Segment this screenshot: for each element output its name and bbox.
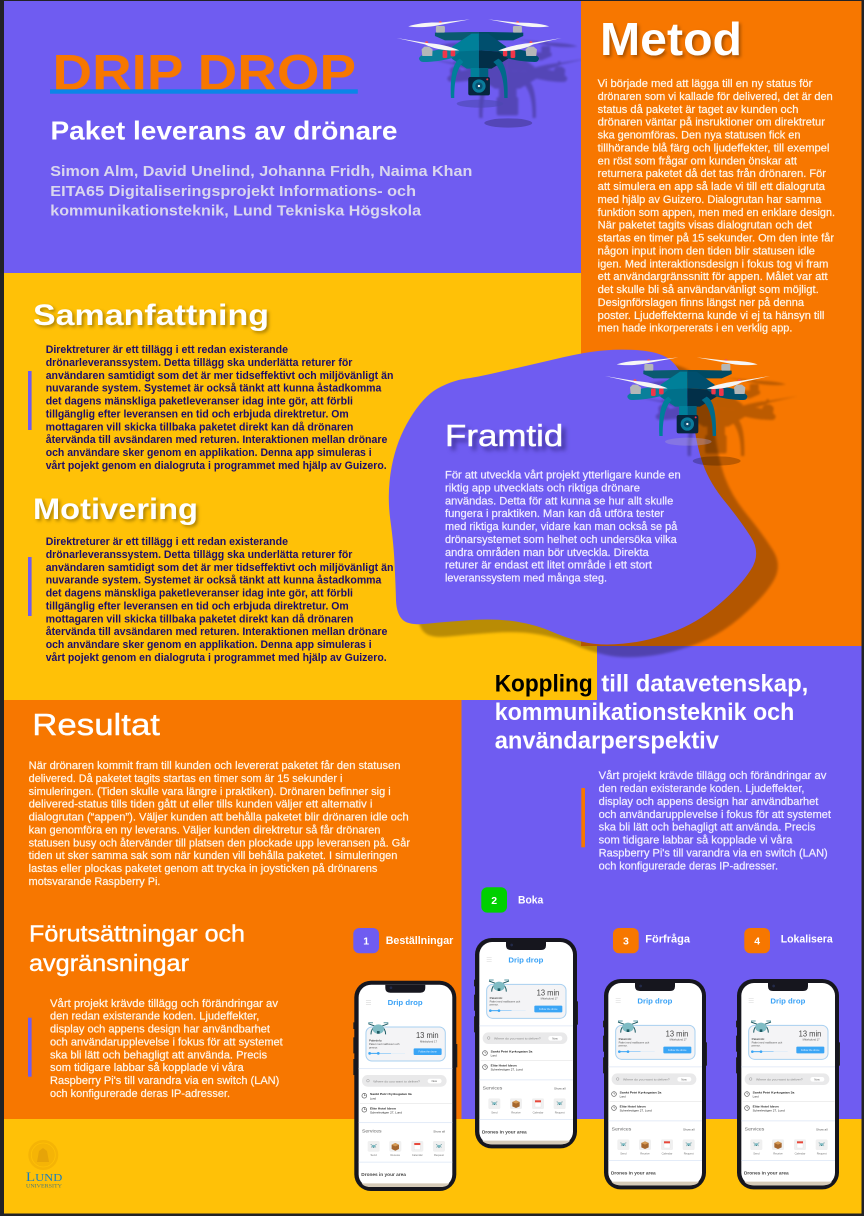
phone 4: Now (814, 1077, 820, 1081)
phone 2: Sankt Petri Kyrkogatan 3a (491, 1049, 533, 1053)
phone 4: Drip drop (770, 996, 806, 1005)
heading: koppling (495, 671, 808, 754)
heading: koppling: kommunikationsteknik och (495, 699, 794, 726)
step 2: boka: Boka (518, 894, 544, 906)
phone 4: Scheelevägen 27, Lund (753, 1109, 785, 1113)
text: metod body: en röst som frågar om kunden önskar att (598, 155, 797, 167)
text: motivering body: nuvarande system. Systemet är också tänkt att kunna åstadkomma (46, 575, 381, 587)
text: motivering body: och användare sker genom en applikation. Denna app simuleras i (46, 639, 372, 651)
phone 1: Request (434, 1153, 444, 1157)
heading: koppling: användarperspektiv (495, 727, 720, 754)
accent bar (581, 788, 585, 847)
text: resultat body: statusen busy och återvänder till platsen den plockade upp leveransen på. Går (29, 837, 410, 849)
step 3: förfråga: 3 (623, 936, 629, 948)
text: resultat body: simuleringen. (Tiden skulle vara längre i praktiken). Drönaren befinner sig i (29, 786, 391, 798)
text: framtid body: returer är endast ett litet område i ett stort (445, 560, 652, 572)
text: resultat body: När drönaren kommit fram till kunden och levererat paketet får den statusen (29, 760, 401, 772)
phone 3: pennor. (619, 1044, 628, 1048)
phone 2: Receive (511, 1110, 521, 1114)
text: resultat body: kan genomföra en ny leverans. Väljer kunden direktretur så får drönaren (29, 824, 381, 836)
text: samanfattning body: drönarleveranssystem. Detta tillägg ska underlätta returer för (46, 357, 352, 369)
phone 2: Calendar (533, 1110, 544, 1114)
text: koppling body: display och appens design har användbarhet (599, 796, 818, 808)
phone 2: Mittskylund 17 (541, 997, 558, 1001)
text: framtid body: drönarsystemet som helhet och undersöka vilka (445, 534, 677, 546)
text: samanfattning body: det dagens mänskliga paketleveranser idag inte gör, att förbli (46, 396, 353, 408)
phone 1: Drip drop (388, 998, 423, 1007)
phone 1: Elite Hotel Ideon (370, 1106, 396, 1110)
text: motivering body: återvända till avsändaren med returen. Interaktionen mellan drönare (46, 626, 387, 638)
text: motivering body: tillgänglig efter leveransen en tid och erbjuda direktretur. Om (46, 600, 349, 612)
authors: EITA65 Digitaliseringsprojekt Informations- och (50, 183, 416, 200)
icon: drone framtid (605, 357, 798, 466)
phone 1: pennor. (369, 1045, 378, 1049)
text: metod body: drönaren väntar på insruktioner om direktretur (598, 117, 825, 129)
text: koppling body: ska bli lätt och behagligt att använda. Precis (599, 822, 815, 834)
text: koppling body: som tidigare labbar så kopplade vi våra (599, 835, 792, 847)
phone 1: Show all (433, 1129, 445, 1133)
phone 2: Elite Hotel Ideon (491, 1064, 517, 1068)
text: koppling body: och användarupplevelse i fokus för att systemet (599, 809, 831, 821)
phone 4: Where do you want to deliver? (756, 1078, 803, 1082)
text: förutsättningar body: som tidigare labbar så kopplade vi våra (50, 1062, 244, 1074)
phone 4: Services (745, 1127, 764, 1132)
phone 4: Drones in your area (744, 1170, 789, 1175)
text: metod body: returnera paketet då det tas från drönaren. För (598, 168, 826, 180)
text: samanfattning body: tillgänglig efter leveransen en tid och erbjuda direktretur. Om (46, 408, 349, 420)
text: motivering body: användaren samtidigt som det är mer tidseffektivt och miljövänligt än (46, 562, 393, 574)
phone 4: Elite Hotel Ideon (753, 1105, 779, 1109)
subtitle: Paket leverans av drönare (50, 115, 398, 145)
text: metod body: igen. Med interaktionsdesign i fokus tog vi fram (598, 258, 829, 270)
panel: koppling background (462, 646, 862, 1119)
text: förutsättningar body: och konfigurerade deras IP-adresser. (50, 1088, 230, 1100)
heading: förutsättningar: Förutsättningar och (29, 921, 245, 947)
phone 1: Scheelevägen 27, Lund (370, 1110, 403, 1114)
step 2: boka: 2 (491, 895, 497, 907)
text: motivering body: Direktreturer är ett tillägg i ett redan existerande (46, 536, 288, 548)
phone 4: Paketinfo: (752, 1037, 765, 1041)
phone 3: Request (684, 1151, 694, 1155)
phone 4: Calendar (795, 1151, 806, 1155)
text: förutsättningar body: den redan existerande koden. Ljudeffekter, (50, 1011, 259, 1023)
heading: samanfattning: Samanfattning (33, 299, 269, 332)
panel: koppling (495, 671, 831, 872)
phone 2: 13 min (537, 988, 559, 997)
panel: header (4, 1, 590, 273)
text: motivering body: vårt pojekt genom en dialogruta i programmet med hjälp av Guizero. (46, 652, 387, 664)
phone 3: Sankt Petri Kyrkogatan 3a (620, 1090, 662, 1094)
phone 2: Now (552, 1036, 558, 1040)
phone 2: Where do you want to deliver? (494, 1037, 541, 1041)
accent bar (28, 557, 32, 616)
text: förutsättningar body (50, 998, 283, 1100)
text: metod body: någon input inom den tiden blir statusen idle (598, 245, 815, 257)
text: metod body: När paketet tagits visas dialogrutan och det (598, 220, 812, 232)
text: förutsättningar body: och användarupplevelse i fokus för att systemet (50, 1036, 283, 1048)
step 4: lokalisera: Lokalisera (781, 934, 834, 946)
text: framtid body: med riktiga kunder, vidare kan man också se på (445, 521, 677, 533)
text: förutsättningar body: ska bli lätt och behagligt att använda. Precis (50, 1049, 267, 1061)
step 1: beställningar: Beställningar (386, 935, 454, 947)
text: framtid body: riktig app utvecklats och riktiga drönare (445, 482, 640, 494)
text: metod body: status då paketet är taget av kunden och (598, 104, 798, 116)
text: samanfattning body: nuvarande system. Systemet är också tänkt att kunna åstadkomma (46, 383, 381, 395)
phone 2: Drones in your area (482, 1129, 527, 1134)
text: resultat body: lastas eller plockas paketet genom att trycka in joysticken på drönarens (29, 863, 377, 875)
phone 2: Send (491, 1110, 498, 1114)
step 4: lokalisera: 4 (754, 936, 760, 948)
text: metod body: startas en timer på 15 sekunder. Om den inte får (598, 233, 834, 245)
text: motivering body: drönarleveranssystem. Detta tillägg ska underlätta returer för (46, 549, 352, 561)
phone 1: Where do you want to deliver? (373, 1079, 420, 1083)
panel: samanfattning and motivering (4, 273, 597, 700)
text: samanfattning body: mottagaren vill skicka tillbaka paketet direkt kan då drönaren (46, 421, 353, 433)
text: metod body: poster. Ljudeffekterna kunde vi ej ta hänsyn till (598, 310, 824, 322)
text: framtid body: användas. Detta för att kunna se hur allt skulle (445, 495, 673, 507)
text: förutsättningar body: Raspberry Pi's till varandra via en switch (LAN) (50, 1075, 279, 1087)
panel: framtid (389, 350, 798, 657)
text: metod body: att simulera en app så lade vi till ett dialogruta (598, 181, 825, 193)
logo: Lund University (26, 1140, 62, 1190)
phone 1: Receive (390, 1153, 401, 1157)
text: motivering body: mottagaren vill skicka tillbaka paketet direkt kan då drönaren (46, 613, 353, 625)
phone 1: 13 min (416, 1031, 439, 1040)
text: metod body: men hade inkorpererats i en verklig app. (598, 323, 792, 335)
phone 3: Services (612, 1127, 631, 1132)
text: koppling body (599, 770, 831, 872)
accent bar (28, 1018, 32, 1077)
phone 4: Request (817, 1151, 827, 1155)
phone 1: Mittskylund 17 (420, 1039, 437, 1043)
phone 4: pennor. (752, 1044, 761, 1048)
phone 1: Paketinfo: (369, 1039, 382, 1043)
phone 3: Paketinfo: (619, 1037, 632, 1041)
phone 3: Send (620, 1151, 627, 1155)
text: metod body: drönaren som vi kallade för delivered, det är den (598, 91, 833, 103)
text: samanfattning body: vårt pojekt genom en dialogruta i programmet med hjälp av Guizero. (46, 460, 387, 472)
phone 2 (474, 938, 578, 1148)
text: metod body: ska genomföras. Den nya statusen fick en (598, 130, 800, 142)
phone 3: Now (681, 1077, 687, 1081)
step 4: lokalisera (744, 928, 834, 953)
text: koppling body: och konfigurerade deras IP-adresser. (599, 860, 778, 872)
logo: Lund University: UNIVERSITY (26, 1184, 62, 1190)
authors (50, 163, 472, 220)
phone 4 (736, 979, 840, 1189)
text: koppling body: Vårt projekt krävde tillägg och förändringar av (599, 770, 827, 782)
heading: koppling: Koppling (495, 671, 593, 698)
text: förutsättningar body: display och appens design har användbarhet (50, 1024, 270, 1036)
text: motivering body (46, 536, 393, 664)
phone 1: Now (432, 1079, 437, 1083)
text: resultat body: delivered-status tills tiden gått ut eller tills kunden väljer ett alternativ i (29, 799, 372, 811)
phone 2: Lund (491, 1054, 497, 1058)
phone 3: 13 min (666, 1029, 688, 1038)
phone 3: Receive (640, 1151, 650, 1155)
phone 3 (603, 979, 707, 1189)
phone 4: Send (753, 1151, 760, 1155)
text: resultat body: tiden ut sker samma sak som när kunden vill behålla paketet. I simuleringen (29, 850, 398, 862)
heading: förutsättningar (29, 921, 245, 976)
step 1: beställningar: 1 (363, 936, 369, 948)
text: metod body: ett användargränssnitt för appen. Målet var att (598, 271, 828, 283)
phone 1: Paket med mailboxen och (369, 1042, 400, 1046)
panel: footer (4, 1119, 862, 1214)
phone 2: pennor. (490, 1003, 499, 1007)
text: resultat body: delivered. Då paketet tagits startas en timer som är 15 sekunder i (29, 773, 342, 785)
phone 3: Follow the drone (668, 1049, 687, 1052)
phone 1: Sankt Petri Kyrkogatan 3a (370, 1092, 412, 1096)
step 3: förfråga (613, 928, 691, 953)
text: framtid body: leveranssystem med många steg. (445, 572, 607, 584)
text: metod body: Vi började med att lägga till en ny status för (598, 78, 813, 90)
phone 4: Mittskylund 17 (803, 1038, 820, 1042)
phone 3: Drones in your area (611, 1170, 656, 1175)
text: motivering body: det dagens mänskliga paketleveranser idag inte gör, att förbli (46, 588, 353, 600)
phone 4: Sankt Petri Kyrkogatan 3a (753, 1090, 795, 1094)
text: samanfattning body: Direktreturer är ett tillägg i ett redan existerande (46, 344, 288, 356)
panel: resultat (4, 700, 462, 1119)
phone 2: Follow the drone (539, 1008, 558, 1011)
panel: metod (581, 1, 862, 646)
text: samanfattning body: och användare sker genom en applikation. Denna app simuleras i (46, 447, 372, 459)
phone 2: Paket med mailboxen och (490, 999, 521, 1003)
heading: förutsättningar: avgränsningar (29, 950, 189, 976)
heading: motivering: Motivering (33, 493, 198, 526)
phone 4: Lund (753, 1095, 759, 1099)
step 1: beställningar (353, 928, 454, 953)
phone 2: Show all (554, 1087, 566, 1091)
title: DRIP DROP (52, 44, 356, 100)
blob (389, 350, 756, 645)
step 2: boka (481, 887, 544, 913)
text: framtid body: andra områden man bör utveckla. Direkta (445, 547, 649, 559)
authors: kommunikationsteknik, Lund Tekniska Högskola (50, 203, 422, 220)
heading: resultat: Resultat (32, 707, 160, 742)
phone 4: Paket med mailboxen och (752, 1040, 783, 1044)
phone 1 (353, 981, 457, 1191)
text: metod body: tillhörande blå färg och ljudeffekter, till exempel (598, 142, 829, 154)
phone 2: Scheelevägen 27, Lund (491, 1068, 523, 1072)
text: metod body: det skulle bli så användarvänligt som möjligt. (598, 284, 819, 296)
text: metod body: med hjälp av Guizero. Dialogrutan har samma (598, 194, 821, 206)
phone 1: Lund (370, 1096, 376, 1100)
step 3: förfråga: Förfråga (645, 934, 691, 946)
phone 1: Calendar (412, 1153, 423, 1157)
text: samanfattning body: användaren samtidigt som det är mer tidseffektivt och miljövänligt än (46, 370, 393, 382)
text: metod body: Designförslagen finns längst ner på denna (598, 297, 804, 309)
text: framtid body: För att utveckla vårt projekt ytterligare kunde en (445, 470, 681, 482)
heading: koppling: till datavetenskap, (601, 671, 808, 698)
heading: framtid: Framtid (445, 418, 563, 453)
text: koppling body: den redan existerande koden. Ljudeffekter, (599, 783, 804, 795)
phone 2: Drip drop (508, 955, 544, 964)
phone 3: Paket med mailboxen och (619, 1040, 650, 1044)
accent bar (28, 371, 32, 430)
phone 3: Show all (683, 1128, 695, 1132)
phone 4: 13 min (799, 1029, 821, 1038)
text: samanfattning body: återvända till avsändaren med returen. Interaktionen mellan drönare (46, 434, 387, 446)
phone 4: Follow the drone (801, 1049, 820, 1052)
phone 3: Scheelevägen 27, Lund (620, 1109, 652, 1113)
phone 1: Send (371, 1153, 377, 1157)
phone 4: Receive (773, 1151, 783, 1155)
phone 2: Services (483, 1086, 502, 1091)
text: samanfattning body (46, 344, 393, 472)
text: resultat body: dialogrutan (“appen”). Väljer kunden att behålla paketet blir drönaren idle och (29, 812, 409, 824)
authors: Simon Alm, David Unelind, Johanna Fridh, Naima Khan (50, 163, 472, 180)
text: förutsättningar body: Vårt projekt krävde tillägg och förändringar av (50, 998, 279, 1010)
phone 1: Drones in your area (361, 1172, 407, 1177)
phone 2: Request (555, 1110, 565, 1114)
phone 1: Services (362, 1128, 382, 1133)
phone 2: Paketinfo: (490, 996, 503, 1000)
phone 3: Where do you want to deliver? (623, 1078, 670, 1082)
text: framtid body: fungera i praktiken. Man kan då utföra tester (445, 508, 664, 520)
phone 3: Drip drop (637, 996, 673, 1005)
phone 3: Calendar (662, 1151, 673, 1155)
phone 3: Lund (620, 1095, 626, 1099)
phone 3: Elite Hotel Ideon (620, 1105, 646, 1109)
text: resultat body: motsvarande Raspberry Pi. (29, 876, 160, 888)
phone 4: Show all (816, 1128, 828, 1132)
phone 3: Mittskylund 17 (670, 1038, 687, 1042)
icon: drone top (397, 19, 590, 128)
phone 1: Follow the drone (418, 1051, 437, 1054)
text: koppling body: Raspberry Pi's till varandra via en switch (LAN) (599, 848, 828, 860)
text: metod body (598, 78, 835, 335)
text: framtid body (445, 470, 681, 584)
logo: Lund University: LUND (26, 1169, 62, 1184)
heading: metod: Metod (600, 13, 742, 65)
text: metod body: funktion som appen, men med en enklare design. (598, 207, 835, 219)
text: resultat body (29, 760, 410, 888)
